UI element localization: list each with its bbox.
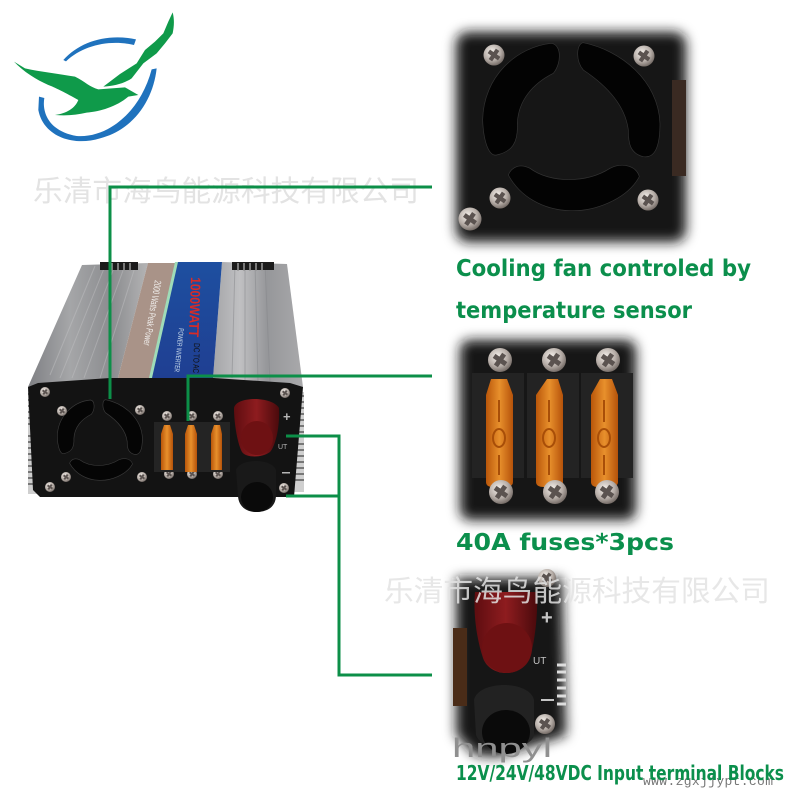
panel marks [278, 409, 291, 474]
heading: cooling fan caption: temperature sensor [456, 298, 693, 324]
connector line: fan [110, 187, 432, 399]
heat sink fins [28, 390, 304, 494]
panel: input terminals close-up [452, 569, 566, 763]
inverter top: blue label strip [149, 262, 222, 378]
icon: seagull company logo [14, 12, 174, 141]
fuse screws [488, 348, 620, 504]
fan vents [483, 43, 660, 211]
panel marks: + [283, 409, 291, 424]
cooling fan vents [57, 400, 142, 480]
watermark: company name top: 乐清市海鸟能源科技有限公司 [33, 175, 419, 208]
panel marks: UT [278, 444, 288, 451]
ghost lettering: hnpyl [452, 733, 552, 763]
red knob close-up [474, 592, 537, 673]
watermark: website: www.zgxjjypt.com [643, 774, 773, 789]
label: brand name: 1000WATT [186, 277, 204, 338]
fuse holders [472, 373, 633, 478]
terminal: red positive knob [234, 399, 279, 456]
orange fuses [486, 379, 618, 487]
terminal marks [533, 607, 554, 701]
connector line: terminals [286, 436, 432, 675]
black knob close-up [474, 685, 534, 754]
label: power inverter: POWER INVERTER [172, 328, 184, 372]
label: DC to AC: DC TO AC [191, 343, 202, 373]
partial fuse at edge [453, 628, 467, 706]
watermark: company name bottom: 乐清市海鸟能源科技有限公司 [384, 575, 770, 608]
terminal: black negative knob [236, 461, 276, 512]
inverter top: left ribbed side [28, 262, 148, 387]
inverter front panel [28, 378, 303, 497]
panel: cooling fan close-up [456, 32, 686, 242]
heading: fuses caption: 40A fuses*3pcs [456, 530, 674, 556]
screws on front panel [40, 387, 290, 493]
side fins [557, 665, 566, 704]
fan screws [458, 44, 658, 230]
terminal marks: UT [533, 656, 546, 667]
inverter top: beige label strip [118, 263, 177, 378]
fuse filaments [493, 400, 610, 475]
photo: power inverter [28, 262, 304, 512]
heading: cooling fan caption [456, 256, 751, 324]
inverter top: right ribbed side [213, 262, 303, 387]
panel: fuses close-up [460, 340, 636, 520]
screws [535, 569, 556, 734]
fuse holders with fuses [154, 422, 230, 472]
terminal marks: + [541, 607, 553, 629]
connector line: fuses [188, 376, 432, 421]
label: peak power: 2000 Watts Peak Power [141, 279, 163, 346]
partial fuse holder at edge [672, 80, 686, 176]
heading: cooling fan caption: Cooling fan controled by [456, 256, 751, 282]
